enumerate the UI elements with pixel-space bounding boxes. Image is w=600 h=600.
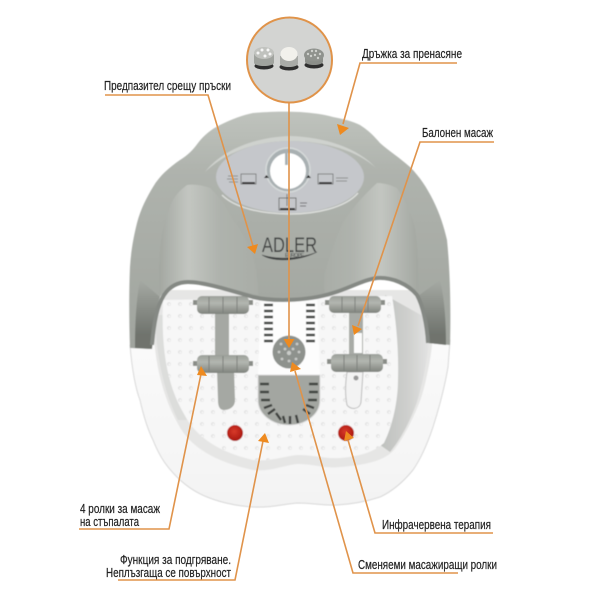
vents bbox=[260, 305, 318, 424]
brand logo: EUROPE bbox=[285, 253, 305, 259]
label: bubble massage bbox=[352, 125, 494, 335]
label: carrying handle bbox=[337, 46, 462, 135]
inner tub bbox=[153, 290, 433, 470]
label: infrared therapy bbox=[344, 431, 493, 533]
dial bbox=[266, 148, 310, 192]
control panel bbox=[216, 141, 364, 214]
foot spa device bbox=[129, 112, 450, 507]
arrow: accessories to disc bbox=[284, 103, 294, 348]
panel symbols bottom bbox=[279, 194, 307, 210]
panel symbols right bbox=[318, 174, 348, 184]
label: foot rollers: на стъпалата bbox=[80, 514, 140, 529]
brand logo: ADLER bbox=[262, 234, 317, 257]
label: foot rollers bbox=[79, 366, 207, 529]
right lid side panel bbox=[324, 183, 418, 295]
infrared light left bbox=[227, 425, 243, 441]
label: heating function: Функция за подгряване. bbox=[120, 552, 231, 567]
label: splash guard: Предпазител срещу пръски bbox=[104, 78, 231, 93]
label: carrying handle: Дръжка за пренасяне bbox=[362, 46, 462, 61]
label: infrared therapy: Инфрачервена терапия bbox=[382, 517, 491, 532]
label: bubble massage: Балонен масаж bbox=[422, 125, 493, 140]
lid rim band bbox=[152, 278, 428, 345]
label: splash guard bbox=[104, 78, 258, 254]
roller: top right bbox=[325, 296, 385, 313]
left lid side panel bbox=[159, 185, 258, 297]
roller: bottom right bbox=[327, 354, 387, 372]
right guide strip bbox=[346, 300, 363, 408]
roller: top left bbox=[193, 296, 253, 314]
left guide strip bbox=[215, 300, 235, 410]
infrared light right bbox=[338, 425, 354, 441]
right tub shading bbox=[376, 295, 430, 452]
right lid leg bbox=[418, 280, 446, 345]
accessory callout circle bbox=[247, 18, 332, 102]
left lid leg bbox=[135, 280, 160, 349]
roller: bottom left bbox=[193, 355, 253, 373]
label: replaceable rollers: Сменяеми масажиращи ролки bbox=[358, 557, 497, 572]
panel symbols left bbox=[227, 174, 256, 184]
massage cap: smooth bbox=[280, 47, 298, 70]
handle top highlight bbox=[205, 136, 376, 172]
label: heating function: Неплъзгаща се повърхност bbox=[106, 565, 231, 580]
massage disc bbox=[272, 336, 306, 368]
massage center unit bbox=[258, 295, 320, 425]
massage cap: dotted bbox=[254, 47, 274, 70]
basin body bbox=[130, 320, 450, 507]
grey lid bbox=[129, 112, 450, 349]
left tub shading bbox=[155, 315, 190, 420]
label: replaceable rollers bbox=[290, 362, 497, 573]
label: heating function bbox=[106, 433, 269, 580]
label: foot rollers: 4 ролки за масаж bbox=[80, 501, 160, 516]
massage cap: studded bbox=[304, 48, 324, 68]
textured floor bbox=[160, 295, 400, 467]
